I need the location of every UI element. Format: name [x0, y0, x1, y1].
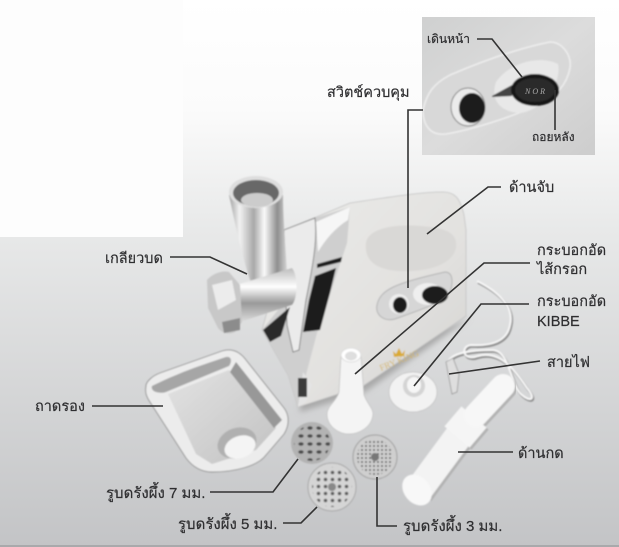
tray hole [213, 422, 261, 464]
power cord [446, 281, 533, 401]
label: 5 mm disc: รูบดรังผึ้ง 5 มม. [178, 513, 277, 533]
inset: control switches close-up [422, 17, 595, 155]
label: sausage stuffer: กระบอกอัด [537, 243, 606, 259]
tray [146, 350, 288, 472]
plug [446, 358, 459, 394]
label: kibbe stuffer: KIBBE [537, 314, 580, 330]
switch letters: N O R [524, 87, 545, 96]
switch plate [423, 42, 570, 134]
meat grinder [207, 176, 470, 412]
label: power cord: สายไฟ [547, 353, 590, 371]
brand logo: FRY KING [378, 348, 421, 373]
label: 3 mm disc: รูบดรังผึ้ง 3 มม. [403, 515, 502, 535]
label: 7 mm disc: รูบดรังผึ้ง 7 มม. [106, 482, 205, 502]
hopper tube [229, 176, 288, 290]
label: grinding screw: เกลียวบด [105, 250, 163, 267]
control panel on body [377, 272, 452, 320]
callout lines [92, 39, 555, 526]
kibbe attachment [389, 372, 437, 412]
perforated disc 7 mm [291, 422, 333, 464]
label: forward: เดินหน้า [427, 32, 470, 46]
label: tray: ถาดรอง [35, 399, 85, 415]
label: reverse: ถอยหลัง [532, 130, 575, 144]
label: control switch: สวิตช์ควบคุม [327, 84, 410, 101]
label: sausage stuffer: ไส้กรอก [536, 260, 587, 278]
sausage nozzle [327, 348, 373, 434]
grinding barrel and head [207, 268, 296, 333]
perforated disc 3 mm [353, 435, 397, 479]
pusher [396, 386, 505, 511]
grinder body [262, 192, 470, 412]
vent grille [298, 378, 307, 397]
perforated disc 5 mm [308, 463, 356, 511]
label: kibbe stuffer: กระบอกอัด [537, 294, 606, 310]
label: pusher: ด้านกด [518, 445, 564, 462]
chrome front of body [262, 207, 350, 407]
label: handle: ด้านจับ [509, 179, 554, 196]
